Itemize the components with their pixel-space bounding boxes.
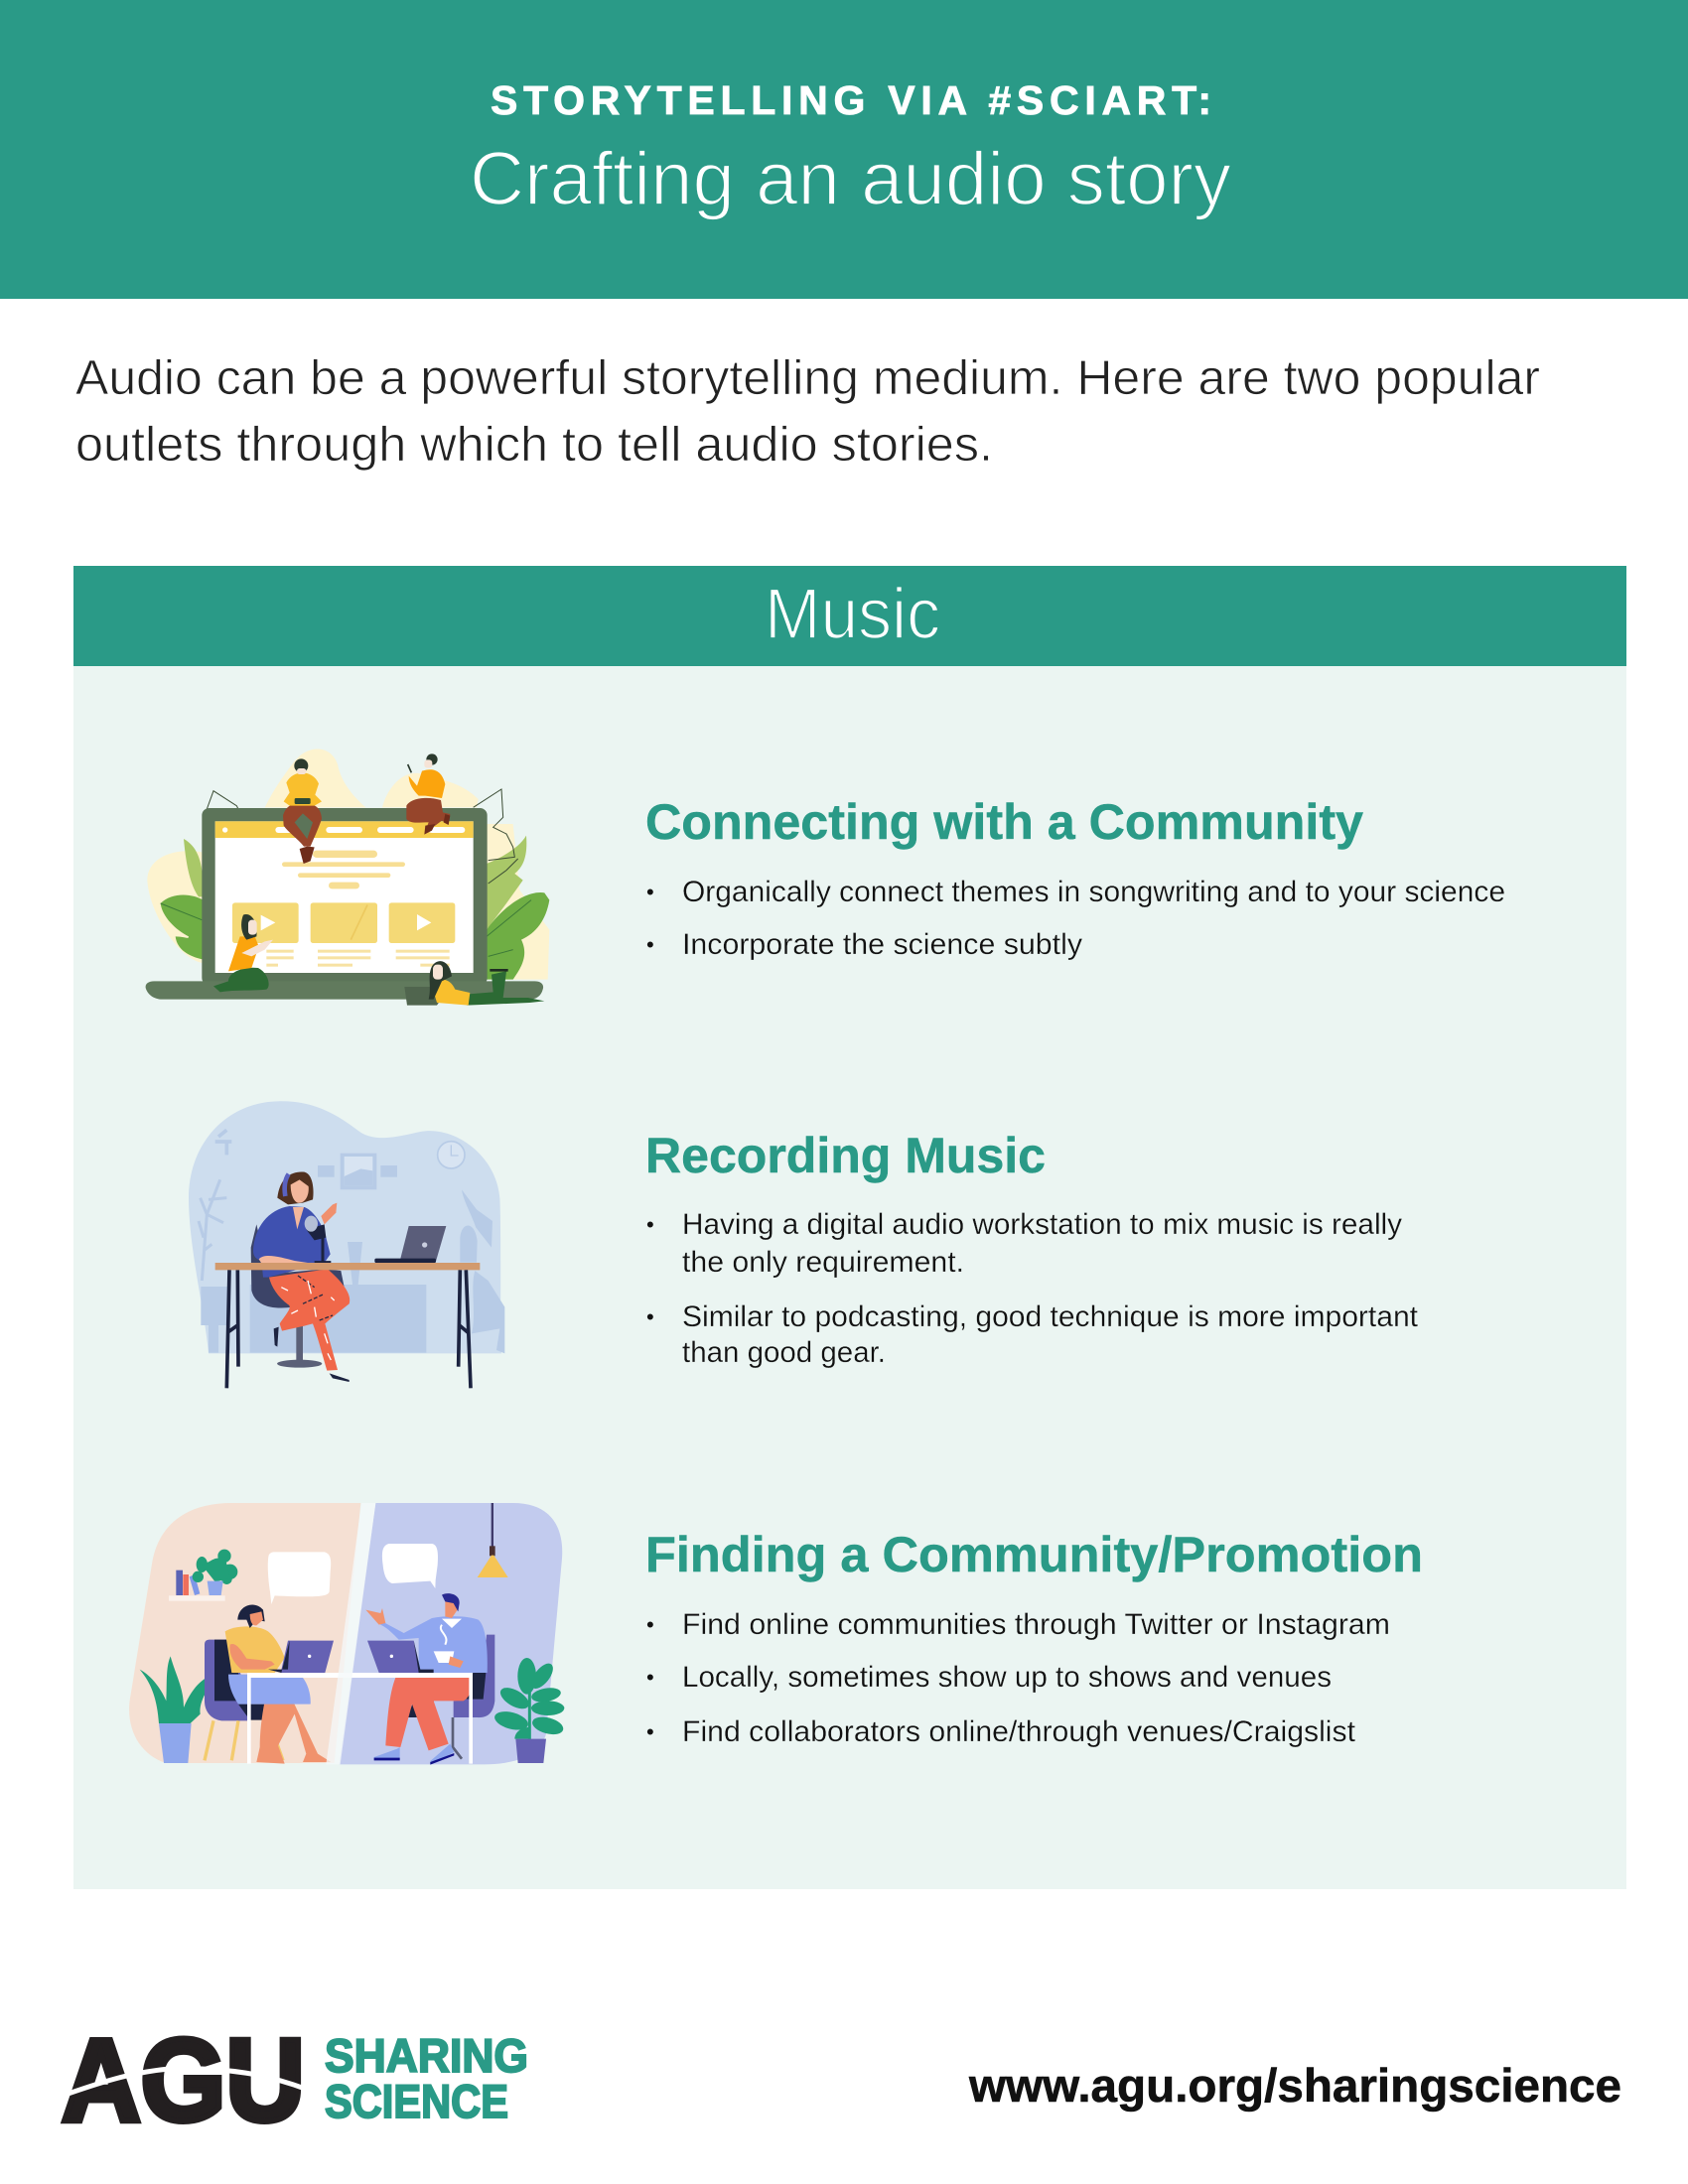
illustration: laptop with community [146, 750, 549, 1006]
background furniture [201, 1189, 504, 1353]
laptop frame [202, 808, 488, 985]
person sitting on floor [213, 914, 273, 992]
microphone [315, 1238, 331, 1263]
laptops [268, 1641, 434, 1673]
right potted plant [492, 1658, 565, 1763]
block: finding a community: • [646, 1665, 654, 1690]
shelf with books and plant [169, 1550, 237, 1601]
illustration: two people talking [129, 1503, 565, 1765]
man [365, 1593, 488, 1765]
arm [259, 1256, 308, 1264]
block: connecting with a community: Organically connect themes in songwriting and to your science [682, 876, 1505, 908]
intro text [75, 351, 1540, 472]
desk [215, 1263, 480, 1388]
block: finding a community: Finding a Community/Promotion [645, 1527, 1423, 1582]
left potted plant [140, 1656, 218, 1763]
window strip [326, 1503, 375, 1764]
laptop base [146, 981, 543, 1000]
blouse [253, 1206, 331, 1278]
man chair [407, 1635, 494, 1759]
chair [251, 1224, 345, 1368]
panel heading bar [73, 566, 1626, 666]
left chair [205, 1640, 293, 1760]
panel: music [73, 566, 1626, 1889]
block: finding a community: • [646, 1719, 654, 1744]
header band [0, 0, 1688, 299]
website url: www.agu.org/sharingscience [968, 2059, 1621, 2112]
block: recording music: • [646, 1304, 654, 1329]
block: connecting with a community [645, 794, 1505, 961]
panel heading bar: Music [765, 575, 940, 654]
block: finding a community: Find online communities through Twitter or Instagram [682, 1608, 1390, 1641]
hair [277, 1171, 314, 1204]
trousers [269, 1269, 350, 1371]
logo: AGU sharing science: SHARING [325, 2029, 528, 2082]
block: recording music: Having a digital audio workstation to mix music is really [682, 1208, 1402, 1241]
wall decor [199, 1130, 465, 1281]
speech bubble left [268, 1552, 331, 1604]
intro text: Audio can be a powerful storytelling medium. Here are two popular [75, 351, 1540, 405]
logo: AGU sharing science [60, 2015, 528, 2146]
shoes [274, 1327, 350, 1382]
pendant lamp [478, 1503, 508, 1577]
logo: AGU sharing science: AGU [62, 2015, 305, 2146]
block: recording music: than good gear. [682, 1336, 886, 1369]
logo: AGU sharing science: SCIENCE [325, 2075, 508, 2127]
laptop [374, 1226, 446, 1263]
background blob [189, 1101, 501, 1353]
beige wall [129, 1503, 360, 1763]
intro text: outlets through which to tell audio stories. [75, 418, 993, 472]
main title: Crafting an audio story [470, 137, 1231, 221]
block: recording music: Similar to podcasting, good technique is more important [682, 1300, 1419, 1333]
block: finding a community: Locally, sometimes show up to shows and venues [682, 1661, 1332, 1694]
woman [225, 1604, 331, 1764]
podcaster [253, 1171, 350, 1382]
title kicker: STORYTELLING VIA #SCIART: [491, 77, 1211, 123]
block: connecting with a community: Connecting with a Community [645, 794, 1363, 850]
laptop screen [215, 821, 474, 973]
block: finding a community [645, 1527, 1423, 1748]
person sitting on laptop, phone [406, 753, 450, 835]
block: finding a community: • [646, 1612, 654, 1637]
block: recording music: • [646, 1212, 654, 1237]
block: connecting with a community: Incorporate the science subtly [682, 928, 1082, 961]
person lying down [404, 961, 544, 1006]
background leaves [184, 839, 204, 896]
speech bubble right [382, 1544, 438, 1588]
block: recording music: Recording Music [645, 1128, 1046, 1183]
person sitting on laptop, tablet [283, 758, 322, 864]
block: finding a community: Find collaborators online/through venues/Craigslist [682, 1715, 1356, 1748]
table [247, 1673, 473, 1764]
illustration: podcaster at desk [189, 1101, 504, 1388]
blue wall [340, 1503, 562, 1764]
block: connecting with a community: • [646, 932, 654, 957]
video thumbnails [232, 902, 455, 967]
website headline bars [282, 851, 405, 888]
block: recording music [645, 1128, 1419, 1369]
block: recording music: the only requirement. [682, 1246, 964, 1279]
block: connecting with a community: • [646, 880, 654, 904]
pale background blobs [147, 750, 549, 980]
website nav bar [215, 821, 474, 838]
